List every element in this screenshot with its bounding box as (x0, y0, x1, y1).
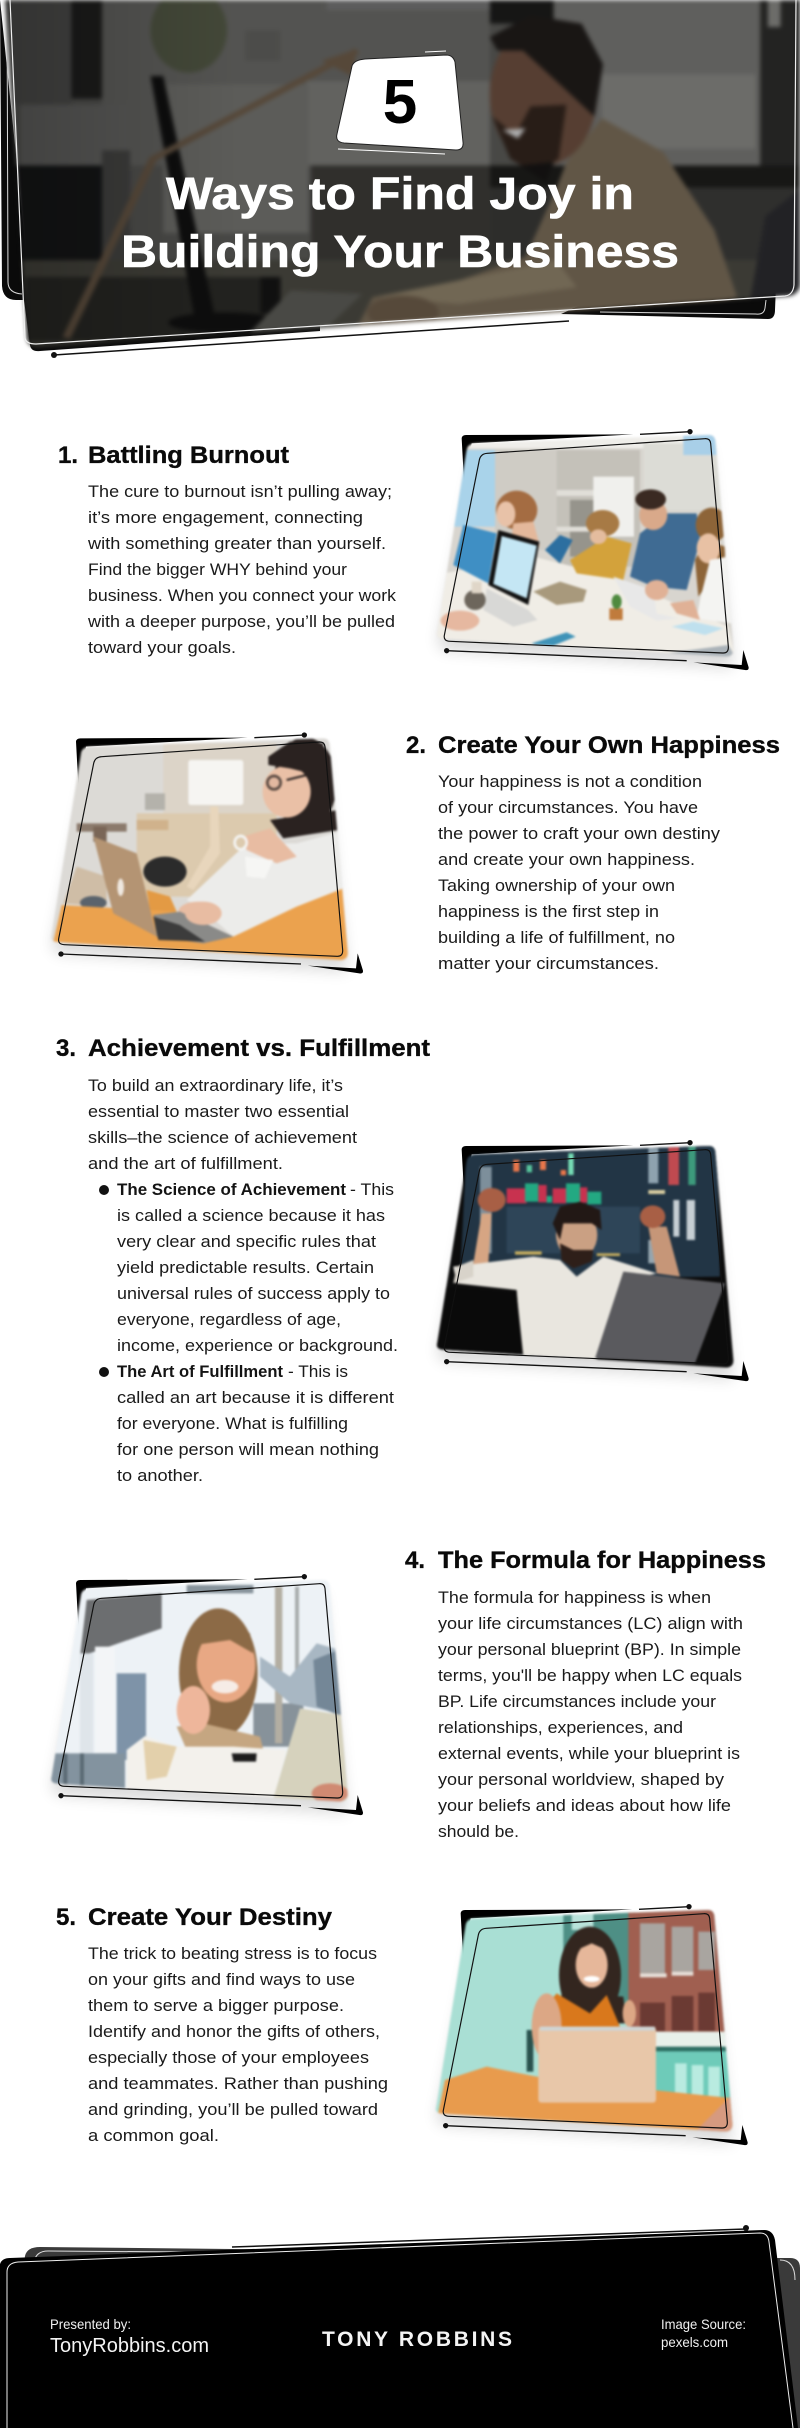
body 1: The cure to burnout isn’t pulling away; (88, 482, 392, 501)
bullet: The Science of Achievement: is called a science because it has (117, 1206, 385, 1225)
bullet: The Art of Fulfillment: The Art of Fulfillment (117, 1362, 283, 1381)
body 3 (88, 1076, 357, 1173)
body 3: skills–the science of achievement (88, 1128, 357, 1147)
bullet: The Science of Achievement: universal rules of success apply to (117, 1284, 390, 1303)
body 4: your life circumstances (LC) align with (438, 1614, 743, 1633)
bullet: The Science of Achievement: very clear and specific rules that (117, 1232, 376, 1251)
body 2: Your happiness is not a condition (438, 772, 702, 791)
heading 1: Battling Burnout (88, 442, 289, 469)
body 1: with a deeper purpose, you’ll be pulled (87, 612, 395, 631)
bullet: The Art of Fulfillment: - This is (288, 1362, 348, 1381)
footer top line with dot (232, 2225, 749, 2247)
body 5 (88, 1944, 388, 2145)
heading 3: 3. (56, 1035, 76, 1062)
header banner (0, 0, 800, 365)
body 4: external events, while your blueprint is (438, 1744, 740, 1763)
body 5: Identify and honor the gifts of others, (88, 2022, 380, 2041)
body 4: your beliefs and ideas about how life (438, 1796, 731, 1815)
section 2: Create Your Own Happiness (43, 730, 780, 973)
title (121, 168, 679, 277)
header photo (0, 0, 800, 365)
photo 3: man celebrating at trading screen (433, 1140, 749, 1381)
presented by (50, 2316, 209, 2357)
body 4: your personal worldview, shaped by (438, 1770, 725, 1789)
heading 2: Create Your Own Happiness (438, 732, 780, 759)
bullet: The Science of Achievement: yield predictable results. Certain (117, 1258, 374, 1277)
body 5: and teammates. Rather than pushing (88, 2074, 388, 2093)
body 4: should be. (438, 1822, 519, 1841)
section 3: Achievement vs. Fulfillment (56, 1035, 749, 1485)
heading 5: Create Your Destiny (88, 1904, 333, 1931)
body 5: a common goal. (88, 2126, 219, 2145)
photo 4: woman on phone with tablet (43, 1570, 363, 1815)
presented by: TonyRobbins.com (50, 2335, 209, 2357)
body 4: The formula for happiness is when (438, 1588, 711, 1607)
body 4: BP. Life circumstances include your (438, 1692, 716, 1711)
image source: Image Source: (661, 2316, 746, 2332)
body 5: The trick to beating stress is to focus (88, 1944, 377, 1963)
section 5: Create Your Destiny (56, 1900, 748, 2145)
body 1: Find the bigger WHY behind your (88, 560, 347, 579)
heading 4: The Formula for Happiness (438, 1547, 766, 1574)
bullet: The Science of Achievement: - This (350, 1180, 394, 1199)
title: Building Your Business (121, 226, 679, 277)
body 2: the power to craft your own destiny (438, 824, 721, 843)
body 1 (87, 482, 397, 657)
footer white outline (7, 2233, 793, 2428)
body 2: happiness is the first step in (438, 902, 659, 921)
title: Ways to Find Joy in (166, 168, 634, 219)
heading 5: 5. (56, 1904, 76, 1931)
photo 2: woman with laptop and mug (43, 730, 363, 973)
body 1: it’s more engagement, connecting (88, 508, 363, 527)
heading 4: 4. (405, 1547, 425, 1574)
body 2: matter your circumstances. (438, 954, 659, 973)
heading 3: Achievement vs. Fulfillment (88, 1035, 430, 1062)
presented by: Presented by: (50, 2316, 131, 2332)
body 1: toward your goals. (88, 638, 236, 657)
body 4: your personal blueprint (BP). In simple (438, 1640, 741, 1659)
image source (661, 2316, 746, 2350)
number badge (337, 51, 463, 154)
photo 1: team at table (433, 429, 749, 670)
brand name: TONY ROBBINS (322, 2328, 512, 2351)
image source: pexels.com (661, 2334, 728, 2350)
number badge: 5 (383, 68, 417, 137)
body 4: relationships, experiences, and (438, 1718, 683, 1737)
footer back layers (24, 2247, 800, 2428)
body 2: Taking ownership of your own (438, 876, 675, 895)
body 3: and the art of fulfillment. (88, 1154, 283, 1173)
bullet: The Art of Fulfillment: to another. (117, 1466, 203, 1485)
bullet: The Art of Fulfillment: called an art because it is different (117, 1388, 394, 1407)
bullet: The Science of Achievement: everyone, regardless of age, (117, 1310, 341, 1329)
header back layers (0, 0, 776, 351)
header white outline (10, 0, 796, 344)
body 1: business. When you connect your work (88, 586, 397, 605)
bullet: The Science of Achievement (99, 1180, 398, 1355)
footer banner (0, 2225, 800, 2428)
body 4 (438, 1588, 743, 1841)
bullet: The Science of Achievement: The Science of Achievement (117, 1180, 346, 1199)
body 4: terms, you'll be happy when LC equals (438, 1666, 742, 1685)
body 2 (438, 772, 721, 973)
body 3: To build an extraordinary life, it’s (88, 1076, 343, 1095)
heading 2: 2. (406, 732, 426, 759)
body 2: of your circumstances. You have (438, 798, 698, 817)
heading 1: 1. (58, 442, 78, 469)
footer main panel (0, 2230, 798, 2428)
header bottom line with dot (51, 321, 569, 358)
body 5: especially those of your employees (88, 2048, 369, 2067)
bullet: The Science of Achievement: income, experience or background. (117, 1336, 398, 1355)
body 1: with something greater than yourself. (87, 534, 386, 553)
bullet: The Art of Fulfillment: for one person will mean nothing (117, 1440, 379, 1459)
bullet: The Art of Fulfillment: for everyone. What is fulfilling (117, 1414, 348, 1433)
photo 5: woman smiling at laptop (430, 1900, 748, 2145)
body 2: and create your own happiness. (438, 850, 695, 869)
body 3: essential to master two essential (88, 1102, 349, 1121)
section 4: The Formula for Happiness (43, 1547, 766, 1841)
body 2: building a life of fulfillment, no (438, 928, 675, 947)
bullet: The Art of Fulfillment (99, 1362, 394, 1485)
body 5: and grinding, you’ll be pulled toward (88, 2100, 378, 2119)
body 5: them to serve a bigger purpose. (88, 1996, 344, 2015)
body 5: on your gifts and find ways to use (88, 1970, 355, 1989)
section 1: Battling Burnout (58, 429, 749, 670)
